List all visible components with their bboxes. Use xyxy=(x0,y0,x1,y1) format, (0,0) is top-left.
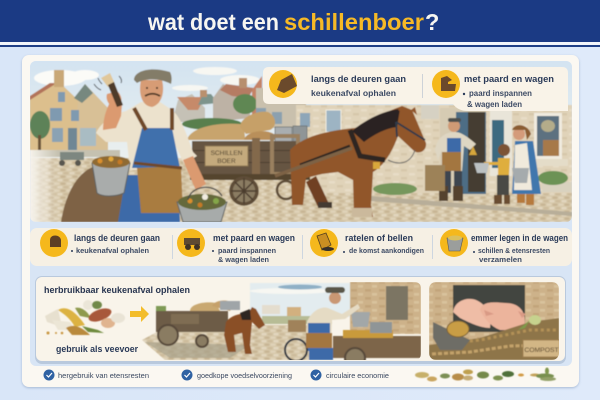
illustration: village street scene xyxy=(30,61,572,222)
main card xyxy=(22,55,579,387)
step 2: horse and wagon: & wagen laden xyxy=(218,255,269,264)
deliverer with apron at door xyxy=(425,118,477,201)
step 4: bucket: verzamelen xyxy=(479,255,522,264)
step 1: doors xyxy=(40,229,160,257)
panel: reuse of kitchen waste xyxy=(35,276,566,368)
text: door to door xyxy=(311,74,406,98)
left edge fade xyxy=(30,150,58,222)
title: ? xyxy=(425,9,439,35)
text: horse and wagon: & wagen laden xyxy=(467,100,522,109)
icon: door knocker badge xyxy=(269,70,297,98)
woman xyxy=(512,125,541,205)
benefit 1 xyxy=(44,370,149,380)
benefit 3: circulaire economie xyxy=(326,371,389,380)
benefit 2: goedkope voedselvoorziening xyxy=(197,371,292,380)
step 2: horse and wagon: paard inspannen xyxy=(218,246,276,255)
step 2: horse and wagon: met paard en wagen xyxy=(213,233,295,243)
milk cans on wagon xyxy=(274,125,308,142)
footer: benefits xyxy=(44,370,389,380)
illustration: pigs and compost xyxy=(429,282,560,360)
text: horse and wagon: paard inspannen xyxy=(469,89,532,98)
title xyxy=(147,9,439,35)
sacks on wagon xyxy=(187,112,276,140)
benefit 3 xyxy=(310,370,389,380)
heading: herbruikbaar keukenafval ophalen xyxy=(44,285,190,296)
bucket left xyxy=(92,156,130,196)
header banner xyxy=(0,0,600,47)
ground: cobblestones xyxy=(30,158,572,222)
step 3: bell: ratelen of bellen xyxy=(345,233,413,243)
text: door to door: keukenafval ophalen xyxy=(311,88,396,98)
callout panel: top labels xyxy=(263,67,568,111)
wagon xyxy=(190,136,310,204)
bucket right xyxy=(177,187,227,222)
wagon: BOER xyxy=(217,158,236,165)
step 2: horse and wagon xyxy=(177,229,295,264)
illustration: pigs and compost: COMPOST xyxy=(524,347,559,354)
market cart in background xyxy=(30,150,120,166)
schillenboer with raised bell xyxy=(94,69,206,222)
brown sack foreground xyxy=(61,166,125,222)
benefit 1: hergebruik van etensresten xyxy=(58,371,149,380)
title: wat doet een xyxy=(147,9,279,35)
step 1: doors: keukenafval ophalen xyxy=(76,246,149,255)
child xyxy=(474,144,510,204)
step 1: doors: langs de deuren gaan xyxy=(74,233,160,243)
step 4: bucket: emmer legen in de wagen xyxy=(471,233,568,243)
left house xyxy=(30,70,108,153)
step 4: bucket: schillen & etensresten xyxy=(478,246,550,255)
step 3: bell xyxy=(310,229,424,257)
panel: blue backing xyxy=(30,61,572,366)
text: horse and wagon xyxy=(463,74,554,109)
text: door to door: langs de deuren gaan xyxy=(311,74,406,85)
step 3: bell: de komst aankondigen xyxy=(349,246,424,255)
divider xyxy=(422,74,423,98)
far houses xyxy=(172,76,306,130)
panel: four steps xyxy=(30,228,572,266)
wagon: SCHILLEN xyxy=(211,150,243,157)
right house wall xyxy=(296,105,572,216)
sky with clouds xyxy=(30,62,572,159)
title: schillenboer xyxy=(284,9,424,35)
text: horse and wagon: met paard en wagen xyxy=(464,74,554,85)
arrow xyxy=(130,306,149,322)
icon: horse badge xyxy=(432,70,460,98)
horse xyxy=(275,106,426,217)
decoration: vegetable scraps xyxy=(415,368,556,382)
caption: gebruik als veevoer xyxy=(56,344,138,355)
illustration: wagon and worker xyxy=(142,282,421,368)
illustration: vegetable peels pile xyxy=(45,300,125,335)
step 4: bucket xyxy=(440,229,568,264)
